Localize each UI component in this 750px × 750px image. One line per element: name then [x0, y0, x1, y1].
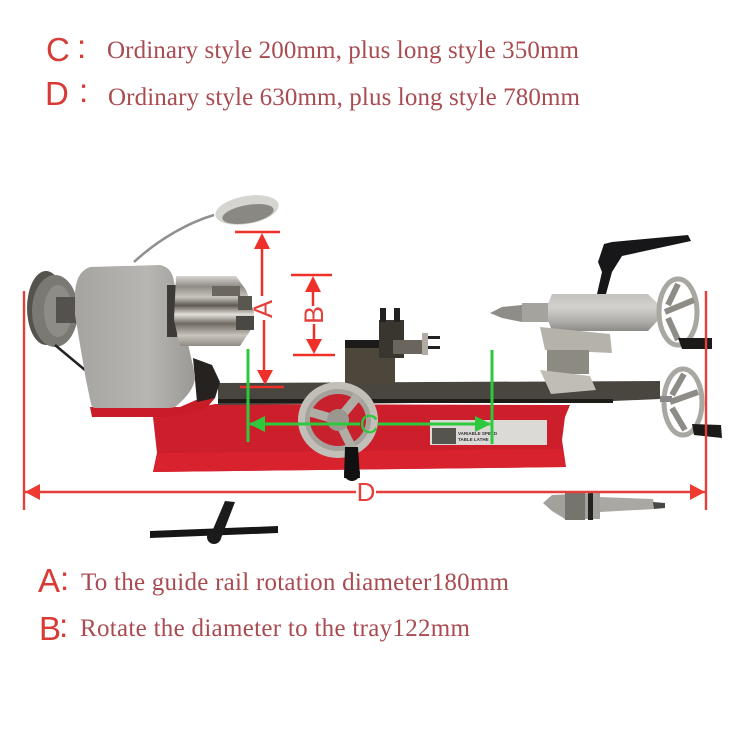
lower handwheel [660, 369, 722, 438]
dimension D text: : [79, 72, 88, 109]
dimension A text [38, 560, 510, 599]
dimension B: swing over tray: B [299, 306, 329, 324]
carriage and tool post [345, 308, 440, 384]
dimension B text [39, 607, 471, 647]
dimension C: travel [248, 349, 492, 444]
dimension B: swing over tray [291, 275, 335, 355]
upper handwheel [659, 279, 712, 349]
tailstock lock handle [597, 235, 691, 294]
tailstock [490, 294, 660, 394]
carriage handwheel [298, 382, 378, 481]
chuck key [150, 501, 278, 544]
dimension C text: Ordinary style 200mm, plus long style 350mm [107, 37, 580, 64]
dimension A text: To the guide rail rotation diameter180mm [81, 569, 510, 596]
dimension D text [45, 72, 581, 112]
pulley [27, 271, 85, 370]
dimension D text: D [45, 75, 69, 112]
dimension A: swing over rail [235, 232, 284, 387]
guide rail [218, 381, 660, 405]
dimension D: overall length [24, 291, 706, 510]
red bed [90, 398, 570, 472]
lamp [134, 191, 281, 262]
dimension A: swing over rail: A [248, 300, 278, 318]
label plate [430, 420, 547, 445]
dimension C: travel: C [360, 409, 378, 439]
dimension D text: Ordinary style 630mm, plus long style 780mm [108, 84, 581, 111]
dimension D: overall length: D [357, 477, 375, 507]
dimension C text [46, 28, 580, 68]
lathe illustration [27, 191, 722, 481]
drill chuck [543, 491, 665, 520]
dimension B text: : [59, 607, 68, 644]
label plate: VARIABLE SPEED [458, 431, 498, 436]
label plate: TABLE LATHE [458, 437, 489, 442]
chuck [167, 276, 254, 346]
dimension A text: A [38, 562, 60, 599]
dimension C text: : [77, 28, 86, 65]
motor [193, 358, 220, 402]
dimension C text: C [46, 31, 70, 68]
dimension B text: B [39, 610, 61, 647]
dimension B text: Rotate the diameter to the tray122mm [80, 615, 471, 642]
dimension A text: : [60, 560, 69, 597]
headstock [75, 265, 195, 408]
